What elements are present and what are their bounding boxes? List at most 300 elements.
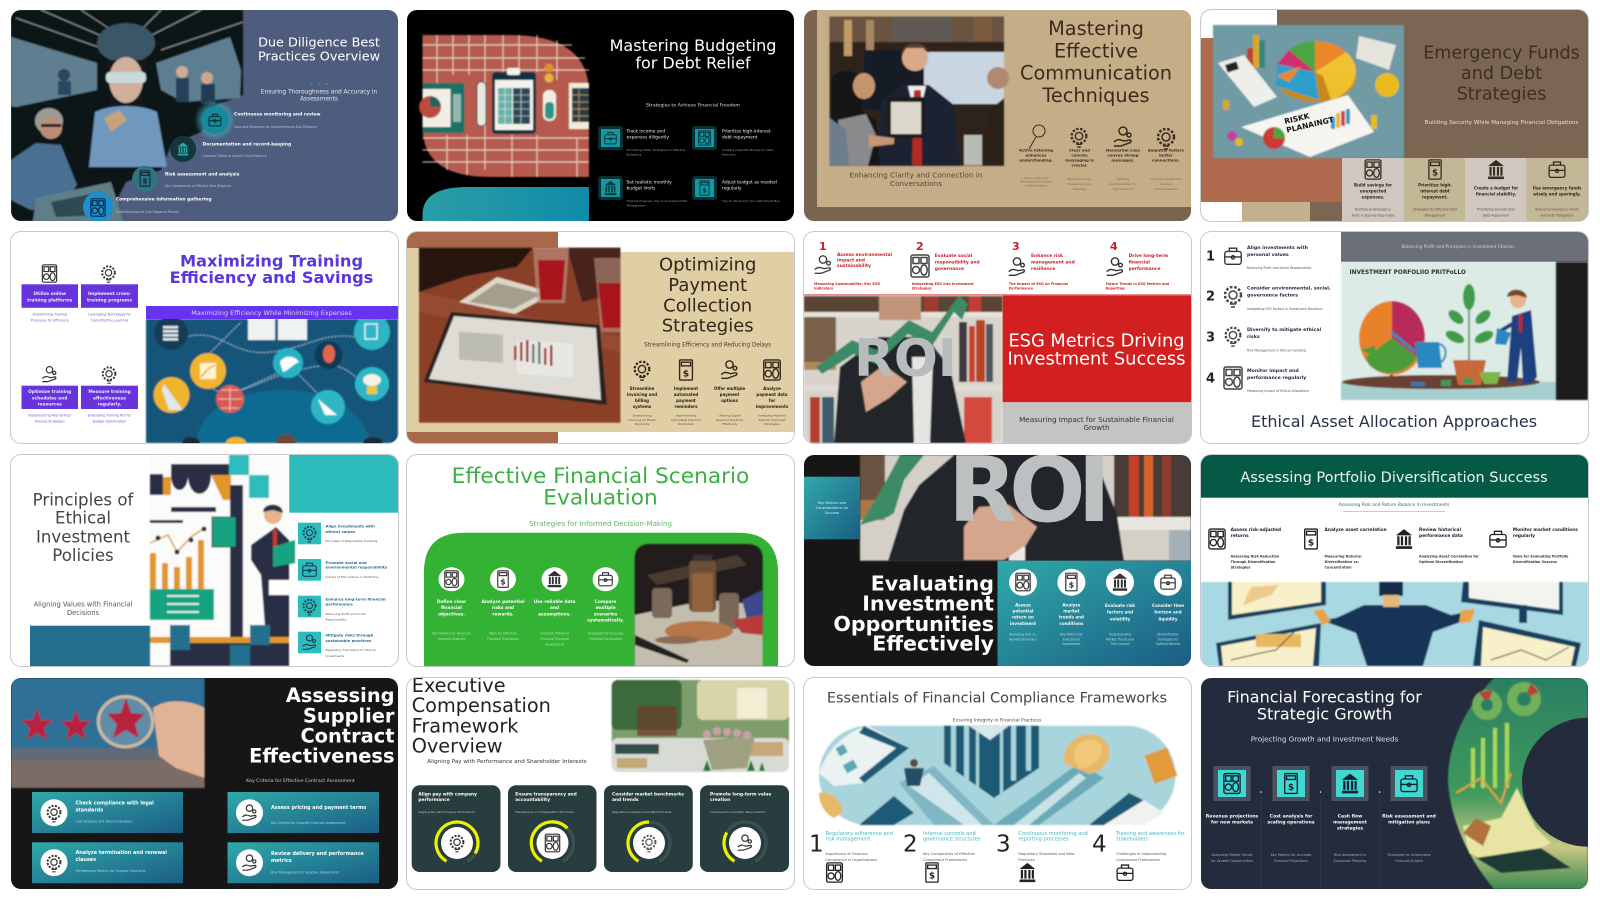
icon: bank node bbox=[170, 136, 196, 162]
criterion: compliance: standards bbox=[75, 807, 103, 813]
principle: long-term performance: Balancing Profit and Social bbox=[325, 612, 365, 616]
criterion: termination: clauses bbox=[75, 857, 96, 863]
pillar 3: 3 bbox=[996, 832, 1011, 858]
metric: historical: Analyzing Asset Correlation for bbox=[1419, 554, 1479, 558]
criterion: compliance bbox=[32, 792, 182, 833]
title: Investment bbox=[862, 592, 994, 616]
title: Payment bbox=[668, 275, 747, 296]
metric: risk-adjusted: returns bbox=[1231, 533, 1249, 539]
factor: return: Analyzing Risk vs. bbox=[1009, 632, 1037, 636]
top metric 4: performance bbox=[1129, 266, 1161, 272]
teal caption box: Considerations for bbox=[816, 506, 849, 510]
tip: empathy: to Clear bbox=[1160, 182, 1173, 186]
row 3: 3 bbox=[1206, 330, 1215, 346]
step: payment data: payment data bbox=[756, 392, 788, 397]
title: Principles of bbox=[32, 490, 134, 509]
factor: return: potential bbox=[1013, 608, 1034, 614]
title: Ethical bbox=[54, 509, 111, 528]
row 1 bbox=[1206, 245, 1312, 270]
row 1: Align investments with bbox=[1247, 245, 1308, 251]
forecast: cash flow bbox=[1332, 766, 1368, 863]
background tan panel bbox=[817, 10, 1191, 207]
pillar 4: Compliance Frameworks bbox=[1116, 858, 1160, 862]
red title block: Investment Success bbox=[1008, 349, 1185, 370]
tip: clear messaging bbox=[1065, 148, 1095, 191]
item: prioritize: Prioritize high-interest bbox=[722, 128, 771, 134]
card: online platforms: Processes for Efficiency bbox=[30, 318, 68, 322]
factor: risk bbox=[1105, 569, 1135, 646]
top metric 4: Drive long-term bbox=[1129, 253, 1169, 259]
row 4: Measuring Impact of Ethical Allocations bbox=[1247, 389, 1309, 393]
metric: historical: Optimal Diversification bbox=[1419, 560, 1464, 564]
panel: Assessing Portfolio Diversification bbox=[1201, 455, 1588, 666]
step: data: Assessment bbox=[545, 642, 565, 646]
step: invoicing bbox=[627, 362, 657, 426]
pillar 4: Challenges in Implementing bbox=[1116, 852, 1166, 856]
top metric 1 bbox=[814, 240, 892, 290]
metric: risk-adjusted: Through Diversification bbox=[1231, 560, 1276, 564]
tip: nonverbal: Tailoring bbox=[1116, 177, 1129, 181]
panel: Due Diligence Best Practices bbox=[10, 10, 398, 221]
tip: nonverbal: convey strong bbox=[1107, 153, 1139, 158]
metric: market conditions: Monitor market conditions bbox=[1513, 527, 1578, 533]
metric card 2 with gauge bbox=[508, 785, 596, 872]
forecast: revenue: for Growth Opportunities bbox=[1211, 859, 1253, 863]
step: payment data: Data for Improved bbox=[759, 418, 786, 422]
strategy: savings: Fund: A Step-by-Step Guide bbox=[1352, 214, 1394, 218]
panel: Executive Compensation Framework bbox=[407, 678, 794, 889]
card: cross-training: Cost-Effective Learning bbox=[90, 318, 128, 322]
strategy: emergency funds bbox=[1526, 158, 1588, 221]
card: effectiveness: effectiveness bbox=[93, 395, 126, 401]
top metric 3: 3 bbox=[1012, 240, 1020, 253]
decorative separators bbox=[1261, 796, 1380, 889]
grey subtitle block bbox=[1003, 402, 1191, 443]
card: effectiveness: Measure training bbox=[88, 389, 130, 395]
principle: social responsibility bbox=[298, 559, 387, 581]
criterion: delivery: Risk Management in Supplier Agreements bbox=[270, 870, 339, 874]
card: cross-training: Implement cross- bbox=[88, 291, 131, 297]
subtitle: Projecting Growth and Investment Needs bbox=[1251, 735, 1399, 744]
title: Strategies bbox=[1457, 85, 1546, 105]
panel: Ethical Asset Allocation bbox=[1201, 232, 1588, 443]
item: prioritize: debt repayment bbox=[722, 134, 758, 140]
title: Policies bbox=[52, 546, 113, 565]
list item: documentation bbox=[202, 141, 291, 158]
card: cross-training: Leveraging Technology for bbox=[88, 313, 131, 317]
row 2: Integrating ESG Factors in Investment Decisions bbox=[1247, 307, 1323, 311]
strategy: budget: Debt Repayment bbox=[1483, 214, 1510, 218]
panel: Essentials of Financial Compliance bbox=[804, 678, 1191, 889]
step: reminders: Automated Payment bbox=[671, 418, 702, 422]
tip: active listening: Understanding bbox=[1025, 183, 1047, 187]
strategy: savings: expenses. bbox=[1362, 195, 1385, 200]
step: payment options: options bbox=[721, 398, 739, 403]
list item: monitoring: Tools and Resources for Comprehensive Due Diligence bbox=[232, 125, 317, 129]
metric card 4 with gauge: Promote long-term value bbox=[710, 791, 771, 797]
subtitle band bbox=[146, 306, 398, 319]
forecast: revenue: for new markets bbox=[1211, 819, 1253, 825]
list item: risk assessment: Key Components of Effective Due Diligence bbox=[164, 184, 231, 188]
photo: award handover bbox=[830, 17, 1009, 166]
item: prioritize bbox=[692, 126, 774, 156]
top metric 4: Future Trends in ESG Metrics and bbox=[1106, 282, 1170, 286]
item: track income: Budgeting bbox=[626, 152, 641, 156]
forecast: cost: Financial Projections bbox=[1274, 859, 1308, 863]
illustration: pie chart and risk planning bbox=[1213, 25, 1404, 158]
strategy: emergency funds: wisely and sparingly. bbox=[1533, 192, 1581, 197]
row 3 bbox=[1206, 327, 1321, 352]
title: Practices Overview bbox=[257, 50, 380, 65]
pillar 1: 1 bbox=[809, 832, 824, 858]
top metric 2: governance bbox=[935, 266, 964, 272]
top metric 2 bbox=[911, 240, 980, 290]
metric: risk-adjusted bbox=[1209, 527, 1281, 570]
subtitle band: Maximizing Efficiency While Minimizing Expenses bbox=[191, 309, 352, 317]
title: Effectively bbox=[872, 632, 995, 656]
metric card 2 with gauge: Ensure transparency and bbox=[515, 791, 577, 797]
metric card 4 with gauge bbox=[700, 785, 789, 872]
step: scenarios: Compare bbox=[595, 599, 617, 605]
icon: ribbon bbox=[1158, 129, 1174, 149]
top metric 3: resilience bbox=[1031, 266, 1055, 272]
row 3: risks bbox=[1247, 334, 1260, 340]
step: data bbox=[534, 567, 575, 646]
strategy: emergency funds: Use emergency funds bbox=[1533, 186, 1582, 191]
card: schedules bbox=[21, 367, 78, 424]
image label: PLANAINGT bbox=[1285, 115, 1335, 135]
panel: Evaluating Investment Opportunities bbox=[804, 455, 1191, 666]
metric: historical: performance data bbox=[1419, 533, 1463, 539]
factor: risk: Market Trends and bbox=[1106, 638, 1134, 642]
step: scenarios: systematically. bbox=[587, 618, 624, 624]
metric: market conditions: Tools for Evaluating Portfolio bbox=[1513, 554, 1569, 558]
title: Effectiveness bbox=[249, 744, 394, 767]
metric card 2 with gauge: accountability bbox=[515, 797, 550, 803]
strategy: high-interest debt: Management bbox=[1425, 214, 1446, 218]
step: payment data: Strategies bbox=[764, 422, 780, 426]
criterion: pricing: Assess pricing and payment terms bbox=[270, 805, 366, 811]
strategy: high-interest debt: repayment. bbox=[1422, 195, 1448, 200]
principle: long-term performance: performance bbox=[325, 602, 353, 607]
row 1: personal values bbox=[1247, 252, 1289, 258]
tip: clear messaging: Nonverbal Cues: bbox=[1067, 177, 1092, 181]
criterion: compliance: Cost Analysis and Value Evaluation bbox=[75, 820, 132, 824]
criterion: delivery: Review delivery and performance bbox=[270, 851, 364, 857]
panel: Effective Financial Scenario Evaluation bbox=[407, 455, 794, 666]
panel: Optimizing Payment Collection bbox=[407, 232, 794, 443]
title: Mastering bbox=[1048, 17, 1144, 40]
step: objectives: Key Metrics for Financial bbox=[432, 632, 471, 636]
step: payment options: Offer multiple bbox=[714, 386, 746, 391]
principle: sustainable practices bbox=[298, 632, 375, 658]
pillar 2: governance structures bbox=[923, 836, 981, 842]
factor: time horizon: liquidity bbox=[1158, 616, 1178, 622]
step: invoicing: Streamline bbox=[630, 386, 655, 391]
metric card 1 with gauge: performance bbox=[418, 797, 450, 803]
title: Efficiency and Savings bbox=[169, 268, 373, 287]
principle: social responsibility: Promote social and bbox=[325, 560, 366, 565]
step: risks: Analyze potential bbox=[482, 599, 525, 605]
pillar 1: risk management bbox=[826, 836, 870, 842]
subtitle: Ensuring Thoroughness and Accuracy in bbox=[260, 90, 377, 96]
strategy: savings: Building an Emergency bbox=[1355, 208, 1391, 212]
illustration: analyst with charts bbox=[150, 455, 294, 666]
tip: clear messaging: crucial. bbox=[1072, 163, 1088, 168]
title: Effective Financial Scenario bbox=[452, 464, 749, 489]
item: adjust budget bbox=[692, 176, 780, 203]
factor: time horizon: horizon and bbox=[1154, 610, 1182, 614]
top band bbox=[1341, 232, 1588, 262]
photo: ROI letters and bookshelf bbox=[804, 294, 1003, 443]
forecast: cost: scaling operations bbox=[1267, 819, 1315, 825]
tip: clear messaging: concise bbox=[1071, 153, 1088, 158]
tip: clear messaging: messaging is bbox=[1065, 158, 1095, 163]
metric card 4 with gauge: Incentives for Long-Term Value Creation bbox=[710, 810, 766, 814]
top metric 2: Integrating ESG into Investment bbox=[912, 282, 974, 286]
top band: Balancing Profit and Principles in Investment Choices bbox=[1402, 244, 1514, 250]
step: reminders: Implementing bbox=[676, 414, 696, 418]
step: risks: rewards. bbox=[492, 611, 514, 617]
step: payment options: Effectively bbox=[722, 422, 738, 426]
metric: market conditions: Diversification Success bbox=[1513, 560, 1557, 564]
step: data: and bbox=[550, 605, 559, 611]
pillar 2 bbox=[903, 831, 981, 882]
forecast: revenue: Analyzing Market Trends bbox=[1212, 853, 1253, 857]
strategy: budget bbox=[1465, 158, 1526, 221]
teal factors panel bbox=[998, 561, 1191, 666]
top metric 2: responsibility and bbox=[935, 260, 980, 266]
top metric 1: Assess environmental bbox=[837, 252, 892, 258]
item: monthly limits: Tracking Expenses: Key to Successful Debt bbox=[626, 199, 688, 203]
factor: time horizon: Diversification bbox=[1157, 632, 1179, 636]
tip: empathy: Empathy fosters bbox=[1148, 148, 1185, 153]
title: and Debt bbox=[1461, 64, 1542, 84]
item: monthly limits: Management bbox=[626, 204, 646, 208]
row 1: Balancing Profit and Social Responsibility bbox=[1247, 266, 1312, 270]
forecast: risk: Risk assessment and bbox=[1382, 813, 1436, 819]
card: cross-training bbox=[80, 266, 138, 322]
accent rule bbox=[804, 294, 1191, 296]
step: payment data bbox=[756, 360, 789, 426]
metric: correlation: Analyze asset correlation bbox=[1324, 527, 1387, 533]
step: risks: Financial Evaluation bbox=[487, 637, 519, 641]
image label: RISKK bbox=[1283, 111, 1312, 126]
photo: ROI letters close-up bbox=[860, 455, 1191, 561]
principle: social responsibility: environmental responsibility bbox=[325, 564, 387, 569]
strategy: budget: financial stability. bbox=[1476, 192, 1517, 197]
row 4: performance regularly bbox=[1247, 375, 1306, 381]
forecast: revenue: Revenue projections bbox=[1206, 813, 1259, 819]
factor: return: investment bbox=[1010, 621, 1036, 626]
item: prioritize: Reduction bbox=[722, 152, 736, 156]
decorative teal shape bbox=[422, 187, 589, 221]
step: data: assumptions. bbox=[538, 611, 571, 617]
photo: tablet, keypad and red glasses bbox=[419, 248, 620, 423]
top metric 2: 2 bbox=[916, 240, 924, 253]
illustration: isometric compliance city bbox=[819, 726, 1177, 825]
factor: time horizon: Optimal Returns bbox=[1156, 642, 1181, 646]
metric: risk-adjusted: Assess risk-adjusted bbox=[1231, 527, 1281, 533]
principle: ethical values: Principles of Responsible Investing bbox=[325, 539, 377, 543]
title: Evaluation bbox=[543, 486, 658, 510]
tip: active listening: enhances bbox=[1026, 153, 1047, 158]
factor: market: trends and bbox=[1059, 614, 1084, 620]
strategy: savings bbox=[1342, 158, 1404, 221]
step: payment options: Payment Solutions bbox=[716, 418, 744, 422]
metric: historical bbox=[1396, 527, 1479, 564]
step: invoicing: systems bbox=[633, 404, 652, 409]
title: Opportunities bbox=[833, 612, 994, 636]
step: payment data: Analyzing Payment bbox=[758, 414, 787, 418]
top metric 3 bbox=[1009, 240, 1075, 290]
step: objectives bbox=[432, 567, 471, 641]
tip: nonverbal bbox=[1106, 148, 1141, 191]
criterion: termination bbox=[32, 842, 182, 883]
row 2: 2 bbox=[1206, 290, 1215, 304]
strategy: savings: unexpected bbox=[1360, 189, 1386, 194]
step: reminders: Implement bbox=[674, 386, 698, 391]
row 1: 1 bbox=[1206, 250, 1215, 264]
card: online platforms bbox=[21, 265, 78, 322]
title: Framework bbox=[412, 714, 519, 737]
factor: market: market bbox=[1063, 608, 1080, 614]
metric: correlation: Diversification vs. bbox=[1324, 560, 1359, 564]
metric card 3 with gauge: Consider market benchmarks bbox=[612, 791, 684, 797]
row 3: Diversify to mitigate ethical bbox=[1247, 327, 1321, 333]
factor: risk: Understanding bbox=[1109, 632, 1131, 636]
icon: briefcase node bbox=[196, 102, 232, 138]
principle: ethical values: ethical values bbox=[325, 529, 355, 534]
row 4: 4 bbox=[1206, 372, 1215, 386]
tip: active listening: Active listening bbox=[1019, 148, 1053, 153]
subtitle: Aligning Values with Financial bbox=[33, 600, 132, 608]
metric: historical: Review historical bbox=[1419, 527, 1461, 533]
item: prioritize: Creating a Realistic Budget for Debt bbox=[722, 148, 774, 152]
list item: risk assessment bbox=[164, 171, 239, 188]
step: invoicing: billing bbox=[635, 398, 649, 403]
title: Collection bbox=[663, 296, 752, 316]
card: effectiveness: Evaluating Training ROI for bbox=[87, 414, 131, 418]
factor: risk: Evaluate risk bbox=[1105, 603, 1135, 608]
top metric 4: Reporting bbox=[1106, 286, 1125, 290]
title: Assessing bbox=[285, 684, 394, 707]
list item: information gathering: Understanding the Due Diligence Process bbox=[116, 210, 179, 214]
bottom-left blue block bbox=[30, 626, 170, 666]
step: risks: Tools for Effective bbox=[488, 632, 517, 636]
factor: time horizon: Strategies for bbox=[1158, 638, 1179, 642]
title: Compensation bbox=[412, 694, 551, 717]
top-right teal block bbox=[288, 455, 398, 513]
metric: risk-adjusted: Assessing Risk Reduction bbox=[1231, 554, 1280, 558]
item: adjust budget: Adjust budget as needed bbox=[722, 180, 777, 186]
principle: sustainable practices: Mitigate risks through bbox=[325, 633, 373, 638]
panel: Assessing Supplier Contract Effectiveness bbox=[10, 678, 398, 889]
metric: market conditions bbox=[1490, 527, 1578, 564]
grey subtitle block: Growth bbox=[1083, 423, 1110, 432]
tip: empathy: better bbox=[1159, 153, 1173, 158]
criterion: pricing bbox=[227, 792, 378, 833]
item: track income: Track income and bbox=[626, 128, 665, 134]
top metric 3: The Impact of ESG on Financial bbox=[1009, 282, 1068, 286]
subtitle: Conversations bbox=[890, 179, 942, 188]
tip: empathy: connections. bbox=[1152, 158, 1180, 163]
title: Supplier bbox=[302, 704, 394, 727]
metric: correlation bbox=[1305, 527, 1387, 570]
step: data: Use reliable data bbox=[534, 599, 575, 605]
panel: Financial Forecasting for Strategic Growth bbox=[1201, 678, 1588, 889]
forecast: cash flow: Expansion Planning bbox=[1334, 859, 1366, 863]
list item: risk assessment: Risk assessment and analysis bbox=[164, 171, 239, 177]
pillar 2: Key Components of Effective bbox=[923, 852, 976, 856]
forecast: risk bbox=[1382, 766, 1436, 863]
top metric 1: Measuring Sustainability: Key ESG bbox=[814, 282, 880, 286]
step: objectives: objectives. bbox=[438, 611, 465, 617]
step: data: Common Pitfalls in bbox=[540, 632, 569, 636]
icon: book node bbox=[132, 166, 158, 192]
forecast: cash flow: Risk Assessment in bbox=[1334, 853, 1366, 857]
strategy: emergency funds: and Debt Obligations bbox=[1541, 214, 1574, 218]
metric: risk-adjusted: Strategies bbox=[1231, 566, 1250, 570]
row 2: governance factors bbox=[1247, 292, 1298, 298]
forecast: cost bbox=[1267, 766, 1315, 863]
factor: return bbox=[1009, 569, 1037, 642]
metric card 1 with gauge: Align pay with company bbox=[418, 791, 477, 797]
title: Effective bbox=[1054, 40, 1138, 63]
title: Overview bbox=[412, 734, 502, 757]
card: schedules: Optimize training bbox=[28, 389, 71, 395]
pillar 4: stakeholders bbox=[1116, 836, 1149, 842]
title: Financial Forecasting for bbox=[1227, 688, 1422, 706]
top metric 1: 1 bbox=[819, 240, 827, 253]
step: reminders: payment bbox=[676, 398, 696, 403]
tip: nonverbal: Nonverbal cues bbox=[1106, 148, 1141, 153]
card: effectiveness: regularly. bbox=[97, 402, 121, 408]
card: schedules: resources bbox=[37, 402, 62, 408]
step: scenarios: Financial Forecasting bbox=[589, 637, 622, 641]
top metric 4: financial bbox=[1129, 260, 1150, 266]
red title block: ESG Metrics Driving bbox=[1008, 330, 1185, 351]
criterion: delivery: metrics bbox=[270, 858, 291, 864]
forecast: risk: Financial Growth bbox=[1395, 859, 1423, 863]
teal caption box: Success bbox=[825, 511, 839, 515]
title: Maximizing Training bbox=[179, 252, 363, 270]
card: schedules: Implementing Peer-to-Peer bbox=[27, 414, 72, 418]
image label: INVESTMENT PORFOLIIO PRITFoLLO bbox=[1350, 270, 1466, 276]
card: schedules: schedules and bbox=[31, 395, 67, 401]
forecast: risk: mitigation plans bbox=[1388, 819, 1430, 825]
principle: ethical values: Align investments with bbox=[325, 524, 375, 529]
item: track income: Prioritizing Debts: Strategies for Effective bbox=[626, 148, 686, 152]
row 2: Consider environmental, social, bbox=[1247, 286, 1331, 292]
principle: sustainable practices: Regulatory Framework for Ethical bbox=[325, 648, 375, 652]
factor: time horizon bbox=[1152, 569, 1184, 646]
tip: nonverbal: messages. bbox=[1111, 158, 1135, 163]
metric card 1 with gauge bbox=[412, 785, 500, 872]
icon: mortarboard bbox=[1072, 129, 1086, 147]
title: Mastering Budgeting bbox=[610, 36, 776, 55]
row 3: Risk Management in Ethical Investing bbox=[1247, 348, 1306, 352]
pillar 2: Compliance Frameworks bbox=[923, 858, 967, 862]
panel: ESG Metrics bbox=[804, 232, 1191, 443]
top metric 4: 4 bbox=[1110, 240, 1118, 253]
tip: active listening: understanding. bbox=[1019, 158, 1053, 163]
step: objectives: financial bbox=[441, 605, 462, 611]
title: Communication bbox=[1020, 62, 1172, 85]
step: invoicing: Invoicing for Faster bbox=[628, 418, 657, 422]
factor: return: return on bbox=[1012, 614, 1034, 620]
step: invoicing: Streamlining bbox=[633, 414, 651, 418]
